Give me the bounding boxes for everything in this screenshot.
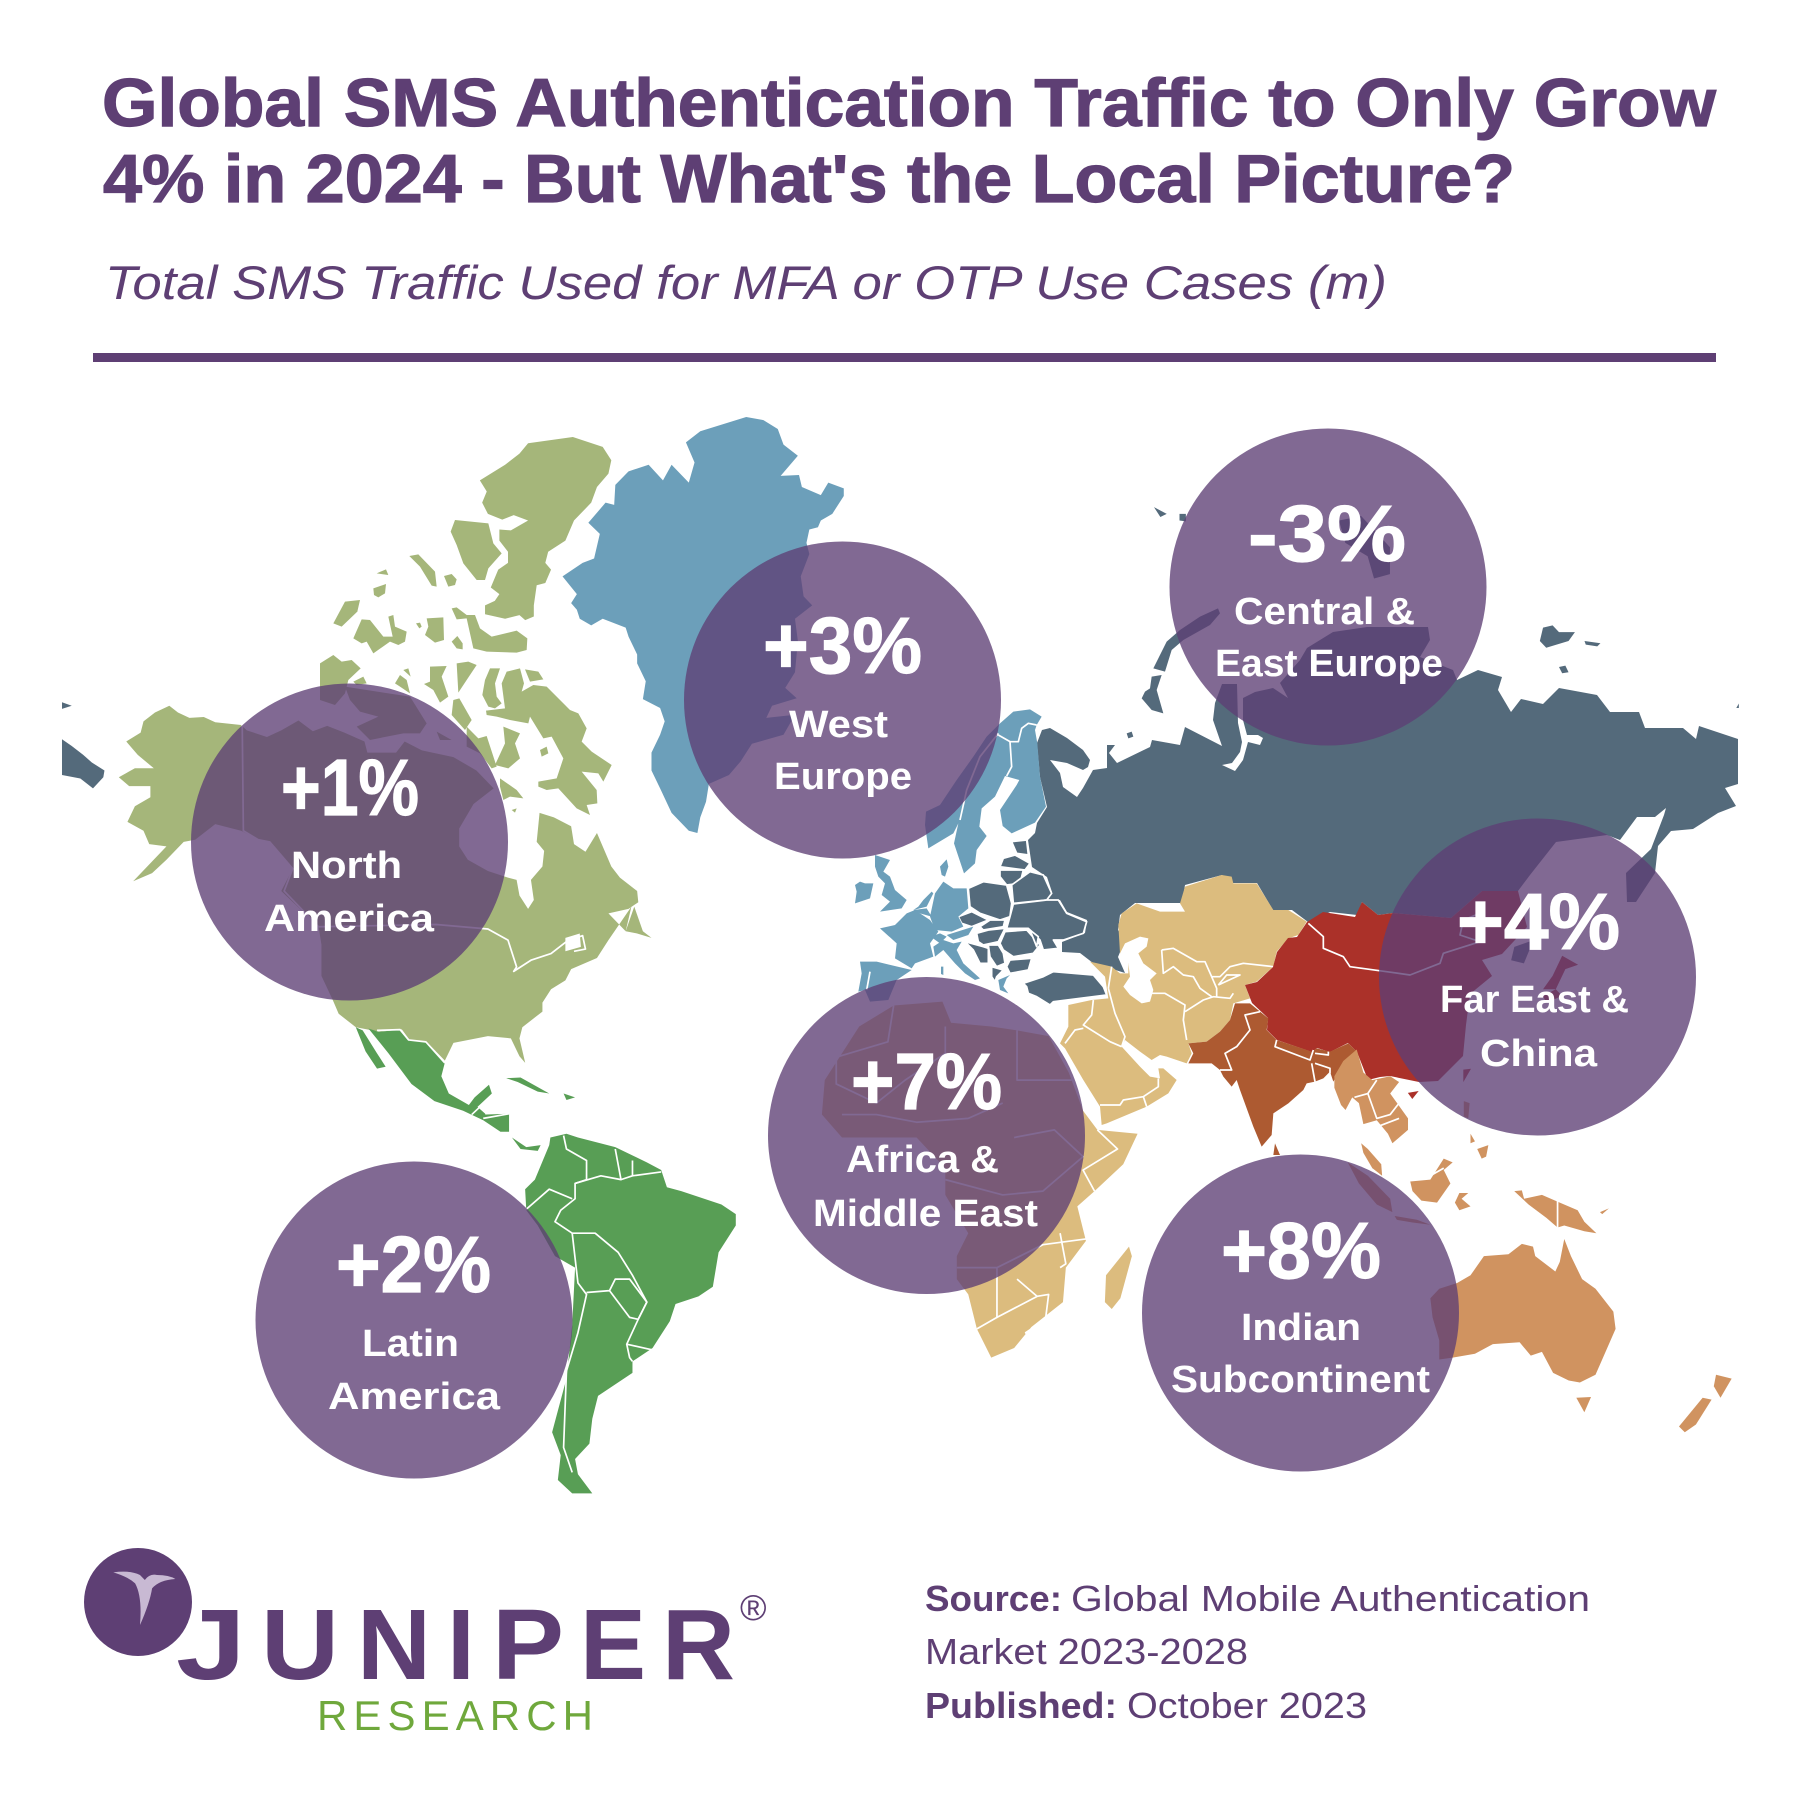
- region: Africa and Middle East: [822, 875, 1307, 1358]
- shape: East Asian islands: [1408, 940, 1578, 1099]
- shape: Eastern Europe and Turkey: [958, 840, 1107, 1005]
- region: Far East and China: [1245, 891, 1578, 1099]
- callout: Far East and China: [1379, 818, 1696, 1136]
- shape: Greenland: [563, 417, 844, 833]
- world map: [62, 417, 1739, 1493]
- callout: Latin America: [256, 1162, 572, 1478]
- region: North America: [119, 437, 651, 1063]
- callout: Far East and China: China: [1480, 1033, 1598, 1075]
- source note: October 2023: [1127, 1685, 1367, 1726]
- callout: West Europe: +3%: [763, 601, 922, 690]
- region: Central and East Europe: [62, 507, 1739, 1005]
- callout: North America: [191, 684, 508, 1000]
- shape: China and Mongolia: [1245, 891, 1527, 1082]
- title: 4% in 2024 - But What's the Local Picture?: [103, 141, 1515, 217]
- wordmark: research: RESEARCH: [317, 1692, 593, 1739]
- subtitle: Total SMS Traffic Used for MFA or OTP Use Cases (m): [105, 256, 1387, 309]
- source note: Global Mobile Authentication: [1071, 1578, 1590, 1619]
- wordmark: J: [176, 1589, 246, 1701]
- callout: Indian Subcontinent: Indian: [1241, 1307, 1361, 1349]
- icon: logo badge: [84, 1548, 192, 1656]
- source note: Published:: [925, 1685, 1117, 1726]
- wordmark: U: [261, 1589, 339, 1701]
- wordmark: I: [447, 1589, 475, 1701]
- shape: mainland: [119, 437, 651, 1063]
- callout: Central and East Europe: [1170, 428, 1486, 746]
- region: Latin America: [356, 1027, 736, 1493]
- wordmark: [176, 1589, 735, 1701]
- region: West Europe and Greenland: [563, 417, 1046, 1002]
- callout: West Europe: [684, 542, 1001, 858]
- shape: Arctic islands: [1127, 608, 1220, 738]
- source note: Market 2023-2028: [925, 1631, 1248, 1672]
- wordmark: E: [580, 1589, 646, 1701]
- source note: Source:: [925, 1578, 1062, 1619]
- shape: Africa: [822, 1002, 1138, 1358]
- title: Global SMS Authentication Traffic to Only Grow: [102, 65, 1717, 141]
- shape: Western Europe: [855, 709, 1046, 1002]
- registered mark: ®: [740, 1587, 767, 1628]
- shape: Chukotka: [62, 702, 104, 788]
- callout: North America: North: [291, 845, 402, 887]
- callout: Central and East Europe: -3%: [1248, 489, 1406, 578]
- callout: Indian Subcontinent: [1142, 1154, 1459, 1472]
- region: Southeast Asia and Oceania: [1334, 1050, 1732, 1432]
- callout: Latin America: +2%: [336, 1220, 491, 1309]
- shape: Russia: [1028, 627, 1738, 973]
- callout: West Europe: Europe: [774, 756, 912, 798]
- callout: West Europe: West: [789, 704, 888, 746]
- source note: [925, 1578, 1590, 1726]
- callout: Africa and Middle East: +7%: [851, 1037, 1002, 1126]
- callout: Central and East Europe: East Europe: [1215, 643, 1443, 685]
- shape: Arctic islands: [320, 520, 612, 815]
- wordmark: R: [662, 1589, 735, 1701]
- shape: Middle East and Central Asia: [1060, 875, 1307, 1125]
- callout: North America: +1%: [281, 743, 419, 832]
- callout: Far East and China: +4%: [1457, 877, 1620, 966]
- callout: Far East and China: Far East &: [1440, 979, 1629, 1021]
- callout: Latin America: America: [328, 1376, 501, 1418]
- callout: Latin America: Latin: [362, 1323, 459, 1365]
- callout: Africa and Middle East: Middle East: [813, 1193, 1038, 1235]
- callout: Africa and Middle East: [768, 977, 1085, 1294]
- shape: Mongolia border: [1308, 913, 1480, 975]
- region: Indian Subcontinent: [1188, 1003, 1357, 1155]
- callout: Indian Subcontinent: Subcontinent: [1171, 1359, 1430, 1401]
- callout: North America: America: [264, 898, 435, 940]
- title: [102, 65, 1717, 217]
- logo: Juniper Research: [84, 1548, 767, 1739]
- callout: Central and East Europe: Central &: [1234, 591, 1415, 633]
- wordmark: P: [492, 1589, 564, 1701]
- wordmark: N: [357, 1589, 431, 1701]
- callout: Indian Subcontinent: +8%: [1221, 1206, 1381, 1295]
- callout: Africa and Middle East: Africa &: [846, 1139, 999, 1181]
